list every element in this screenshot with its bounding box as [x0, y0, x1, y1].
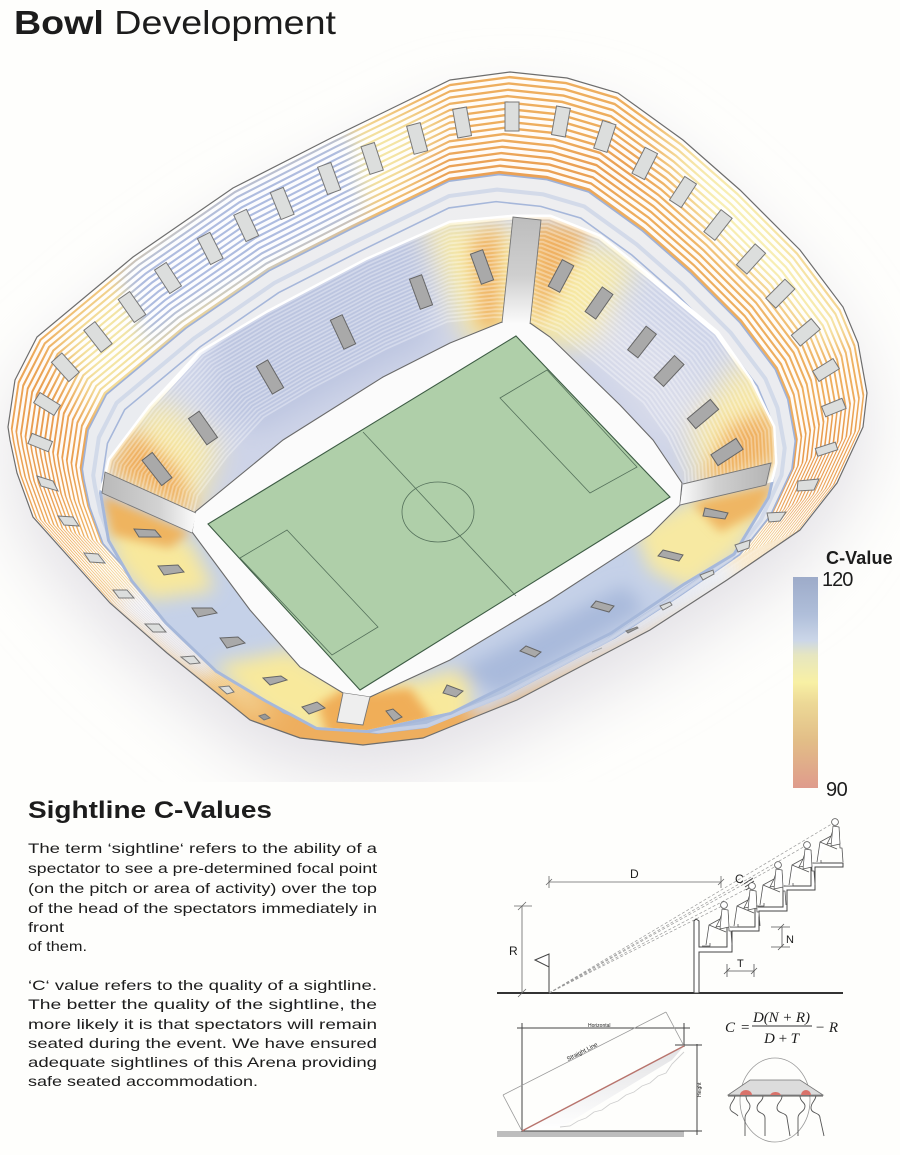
- body text: C value explanation: [28, 977, 377, 1089]
- body text: C value explanation: ‘C‘ value refers to the quality of a sightline.: [28, 977, 377, 993]
- concourse band: [82, 175, 795, 733]
- red view blocks: [740, 1090, 811, 1095]
- dimension D: [546, 876, 724, 888]
- seat tray: [728, 1080, 823, 1095]
- flag at focal point: [535, 954, 549, 993]
- formula: D(N + R): [752, 1010, 810, 1026]
- body text: sightline definition: The term ‘sightline‘ refers to the ability of a: [28, 840, 377, 856]
- inner concourse around pitch: [192, 322, 682, 697]
- title: Bowl Development: [14, 4, 336, 41]
- body text: sightline definition: spectator to see a pre-determined focal point: [28, 860, 377, 876]
- legend gradient bar: [793, 577, 818, 788]
- lower tier seating heat map: [99, 214, 778, 733]
- vomitory: left: [102, 472, 196, 533]
- ground line: [497, 992, 843, 994]
- formula: − R: [815, 1020, 838, 1036]
- legend heading: C-Value: [826, 548, 893, 568]
- vomitory: bottom: [337, 693, 370, 725]
- stepped profile: [560, 1052, 684, 1127]
- dimension R: [514, 902, 532, 997]
- stepped terrace section: [694, 863, 843, 993]
- dimension C ticks: [744, 878, 755, 890]
- label R: R: [509, 944, 518, 958]
- spectators: [702, 819, 843, 946]
- body text: sightline definition: (on the pitch or area of activity) over the top: [28, 880, 377, 896]
- body text: C value explanation: adequate sightlines of this Arena providing: [28, 1054, 377, 1070]
- body text: sightline definition: front: [28, 919, 64, 935]
- body text: C value explanation: more likely it is that spectators will remain: [28, 1016, 377, 1032]
- body text: C value explanation: safe seated accommodation.: [28, 1073, 258, 1089]
- frame lines: [517, 1023, 702, 1135]
- label D: D: [630, 867, 639, 881]
- dimension T: [724, 964, 757, 977]
- vomitory: top: [502, 217, 541, 324]
- seated heads from behind: [728, 1096, 824, 1136]
- formula: C: [725, 1020, 736, 1036]
- legend max label: 120: [822, 569, 853, 591]
- formula: D + T: [763, 1031, 801, 1047]
- label T: T: [737, 958, 744, 970]
- lower half of lower tier: [99, 482, 774, 733]
- straight line measure: [503, 1012, 684, 1131]
- legend: C-Value colour scale: [793, 548, 893, 801]
- shaded seating wedge: [522, 1046, 684, 1131]
- rake geometry diagram: [497, 1012, 703, 1137]
- body text: C value explanation: seated during the event. We have ensured: [28, 1035, 377, 1051]
- vomitory: right: [680, 463, 771, 505]
- formula: [725, 1010, 838, 1047]
- label N: N: [786, 934, 794, 946]
- formula: =: [741, 1020, 749, 1036]
- heading: Sightline C-Values: Sightline C-Values: [28, 797, 272, 824]
- sightlines: [549, 822, 835, 993]
- upper tier seating heat map: [7, 71, 868, 746]
- ground shadow behind stadium: [0, 328, 881, 782]
- body text: sightline definition: of them.: [28, 938, 87, 954]
- ground band: [497, 1131, 684, 1137]
- dimension N: [771, 924, 790, 950]
- body text: sightline definition: [28, 840, 377, 954]
- label: straight line: Straight Line: [566, 1042, 600, 1063]
- sightline section diagram: [497, 819, 843, 997]
- legend min label: 90: [826, 779, 848, 801]
- pitch markings: [240, 370, 637, 655]
- field of view diagram: [728, 1058, 824, 1142]
- label: height: Height: [697, 1082, 703, 1097]
- label: horizontal: Horizontal: [588, 1023, 611, 1029]
- pitch: [208, 336, 670, 690]
- body text: C value explanation: The better the quality of the sightline, the: [28, 996, 377, 1012]
- label C: C: [735, 872, 744, 886]
- view ellipse: [740, 1058, 810, 1142]
- lower tier portals: [134, 250, 743, 721]
- rake line: [522, 1046, 684, 1131]
- upper tier portals: [28, 102, 846, 720]
- stadium bowl plan: [7, 71, 868, 746]
- body text: sightline definition: of the head of the spectators immediately in: [28, 900, 377, 916]
